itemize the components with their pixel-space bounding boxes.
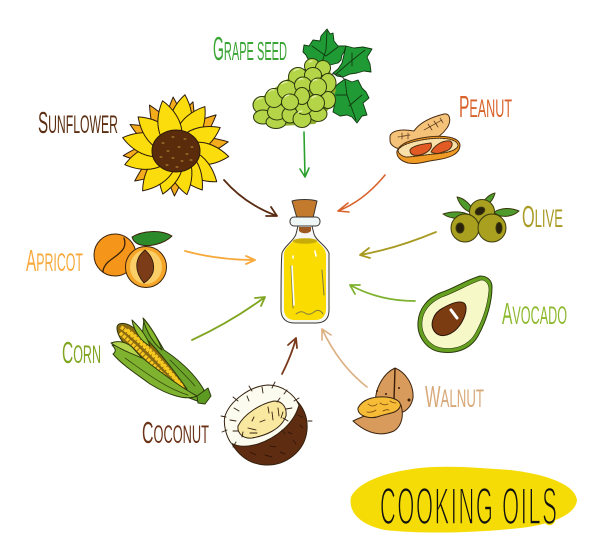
grape cluster bbox=[256, 64, 336, 126]
label: corn: CORN bbox=[62, 335, 101, 370]
icon: peanut bbox=[390, 114, 460, 164]
olive fruits bbox=[451, 200, 506, 242]
olive leaves bbox=[443, 193, 519, 218]
label: peanut: PEANUT bbox=[459, 89, 512, 124]
apricot half bbox=[126, 246, 166, 288]
arrow: avocado to bottle bbox=[350, 285, 415, 301]
icon: apricots bbox=[94, 232, 172, 288]
oil bbox=[284, 238, 326, 320]
icon: walnut bbox=[353, 368, 413, 434]
apricot leaf bbox=[132, 232, 172, 246]
arrow: peanut to bottle bbox=[338, 175, 385, 212]
walnut whole shell bbox=[375, 368, 413, 413]
cork bottom bbox=[299, 227, 311, 233]
corn husk front bbox=[112, 345, 197, 398]
bottle neck ring bbox=[290, 217, 320, 226]
corn husk back bbox=[140, 319, 204, 402]
arrow: grape seed to bottle bbox=[300, 132, 309, 177]
infographic canvas: GRAPE SEED bbox=[213, 30, 287, 67]
corn cob bbox=[117, 323, 187, 389]
label: coconut: COCONUT bbox=[142, 415, 209, 450]
arrow: corn to bottle bbox=[192, 297, 265, 340]
icon: oil bottle bbox=[281, 200, 329, 323]
label: sunflower: SUNFLOWER bbox=[38, 105, 118, 140]
coconut white flesh bbox=[224, 385, 299, 446]
whole apricot bbox=[94, 234, 136, 276]
icon: sunflower bbox=[120, 93, 230, 198]
icon: coconut bbox=[221, 382, 312, 465]
walnut open half bbox=[353, 405, 402, 434]
icon: corn bbox=[111, 318, 211, 404]
label: walnut: WALNUT bbox=[425, 379, 484, 414]
icon: grapes with leaves bbox=[253, 29, 372, 128]
avocado skin bbox=[418, 276, 492, 352]
icon: avocado bbox=[418, 276, 492, 352]
title banner bbox=[351, 467, 577, 536]
bottle glass bbox=[281, 226, 329, 323]
title text: COOKING OILS bbox=[380, 478, 557, 536]
arrow: walnut to bottle bbox=[322, 329, 367, 387]
coconut shell bbox=[232, 400, 307, 465]
icon: olives bbox=[443, 193, 519, 242]
coconut inner meat bbox=[238, 401, 286, 438]
corn stem bbox=[197, 388, 211, 404]
label: olive: OLIVE bbox=[522, 199, 563, 234]
closed peanut shell bbox=[390, 114, 450, 150]
walnut kernel bbox=[358, 397, 400, 418]
arrow: apricot to bottle bbox=[185, 251, 255, 264]
avocado flesh bbox=[422, 280, 489, 348]
arrow: olive to bottle bbox=[360, 232, 436, 258]
avocado seed bbox=[432, 302, 466, 336]
banner brush shape bbox=[351, 467, 577, 533]
leaves bbox=[303, 29, 372, 123]
peanut kernels bbox=[410, 143, 431, 155]
arrow: coconut to bottle bbox=[282, 338, 297, 374]
cork top bbox=[292, 200, 317, 220]
open peanut shell bbox=[397, 136, 460, 164]
label: apricot: APRICOT bbox=[26, 243, 83, 278]
apricot pit bbox=[137, 250, 154, 283]
arrow: sunflower to bottle bbox=[224, 180, 277, 216]
